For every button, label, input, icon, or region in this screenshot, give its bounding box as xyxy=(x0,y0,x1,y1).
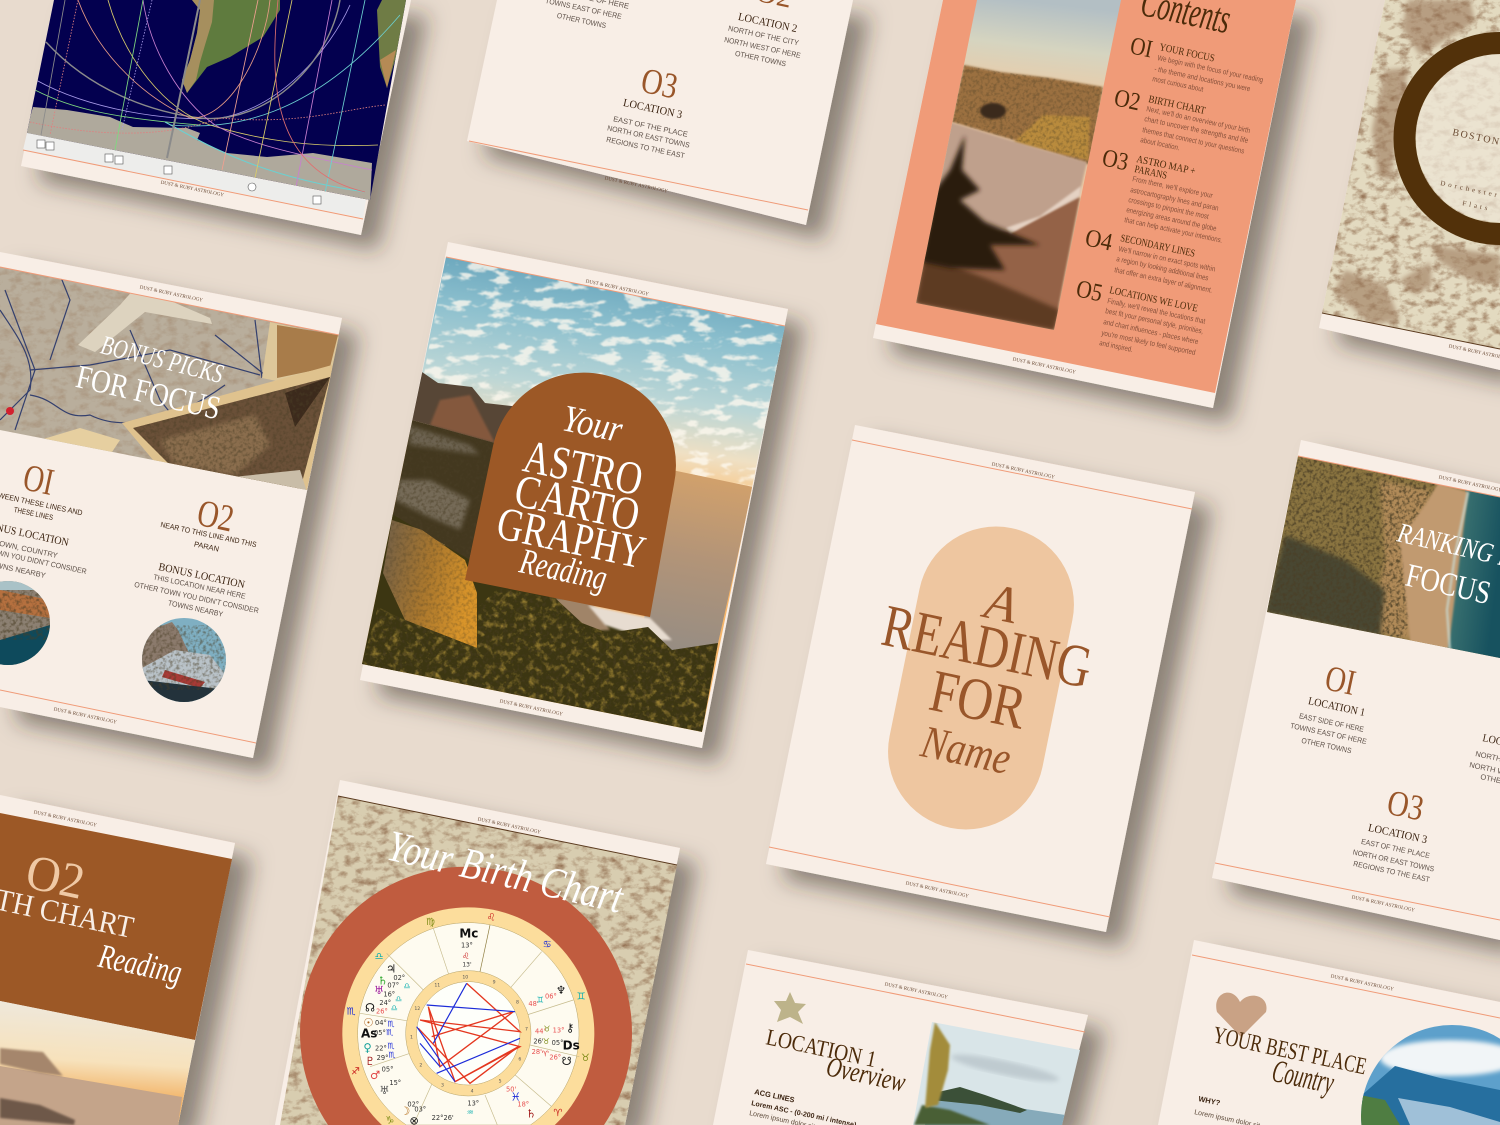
chart glyphs: 9 xyxy=(493,979,496,985)
cover title xyxy=(492,397,650,598)
chart glyphs xyxy=(347,913,590,1125)
chart glyphs: 6 xyxy=(518,1057,521,1063)
pill title: Name xyxy=(916,715,1016,784)
chart glyphs: 2 xyxy=(419,1063,422,1069)
column 02: PARAN xyxy=(193,540,220,554)
chart glyphs: 29° xyxy=(377,1054,388,1062)
pill title: READING xyxy=(877,592,1098,701)
header: DUST & RUBY ASTROLOGY xyxy=(33,810,97,829)
item 03: From there, we'll explore your xyxy=(1132,174,1214,200)
natal chart wheel xyxy=(342,907,594,1125)
location two text: NORTH WEST OF HERE xyxy=(723,35,802,60)
item 01: YOUR FOCUS xyxy=(1158,42,1216,65)
location three text: EAST OF THE PLACE xyxy=(612,114,689,139)
chart glyphs: ♅ xyxy=(379,1083,389,1097)
chart glyphs: 05° xyxy=(374,1029,386,1037)
item 04: a region by looking additional lines xyxy=(1116,254,1210,283)
item 02: themes that connect to your questions xyxy=(1142,125,1245,156)
page title: Country xyxy=(1269,1052,1338,1100)
page title xyxy=(1394,517,1500,612)
item 04: that offer an extra layer of alignment. xyxy=(1114,265,1213,295)
chart glyphs: 18° xyxy=(517,1101,529,1109)
chart glyphs: 28' xyxy=(532,1048,542,1056)
panel: ranking page xyxy=(1212,440,1500,940)
item 05 xyxy=(1074,275,1207,357)
chart glyphs: 07° xyxy=(387,981,399,989)
chart glyphs: ♎ xyxy=(375,951,384,962)
chart glyphs: 11 xyxy=(434,983,440,989)
chart glyphs: 03° xyxy=(414,1106,426,1114)
world map xyxy=(27,0,406,200)
map labels xyxy=(1440,127,1500,213)
chart glyphs: ♏ xyxy=(387,1020,395,1029)
peach pill xyxy=(874,513,1088,843)
pale inset inside the ring xyxy=(1416,54,1500,222)
cover title: Your xyxy=(559,397,626,451)
footer: DUST & RUBY ASTROLOGY xyxy=(1012,357,1076,376)
location 1: OTHER TOWNS xyxy=(1301,736,1352,755)
column 02 xyxy=(133,492,260,619)
location 1: LOCATION 1 xyxy=(1307,695,1366,719)
chart glyphs: 1 xyxy=(410,1034,413,1040)
orange rule xyxy=(1192,955,1500,1018)
chart glyphs: ♎ xyxy=(403,981,411,990)
chart glyphs: 3 xyxy=(441,1083,444,1089)
mountain lake photo xyxy=(1355,1020,1500,1125)
pill title: A xyxy=(977,572,1023,635)
location 2 xyxy=(1469,732,1500,793)
chart glyphs: 48' xyxy=(528,1000,539,1008)
header: DUST & RUBY ASTROLOGY xyxy=(991,462,1055,481)
chart glyphs: ♎ xyxy=(395,995,402,1004)
location two text: OTHER TOWNS xyxy=(734,49,787,68)
sunset coast photo xyxy=(340,250,790,740)
item 01: We begin with the focus of your reading xyxy=(1157,53,1264,84)
column 02: TOWNS NEARBY xyxy=(167,598,224,619)
item 05: Finally, we'll reveal the locations that xyxy=(1107,296,1207,326)
location 3: O3 xyxy=(1384,782,1427,829)
chart glyphs: ♋ xyxy=(543,940,552,951)
chart glyphs: ♇ xyxy=(365,1054,375,1068)
panel: birth chart chapter page xyxy=(0,795,235,1125)
legend band xyxy=(23,133,366,218)
item 05: you're most likely to feel supported xyxy=(1101,328,1196,357)
chart glyphs: ☋ xyxy=(562,1054,572,1068)
panel: astrocartography world map page xyxy=(0,0,420,235)
item 04: SECONDARY LINES xyxy=(1119,233,1196,260)
column 01: OI xyxy=(19,457,58,504)
chart glyphs: 02° xyxy=(407,1101,419,1109)
item 02 xyxy=(1112,84,1251,156)
footer: DUST & RUBY ASTROLOGY xyxy=(1351,895,1415,914)
column 01 xyxy=(0,457,88,580)
chapter title xyxy=(0,843,185,992)
chart glyphs: 22° xyxy=(375,1045,387,1053)
ring xyxy=(1404,43,1500,234)
item 05: best fit your personal style, priorities, xyxy=(1105,306,1204,336)
item 01: most curious about xyxy=(1152,74,1205,94)
cover title: Reading xyxy=(516,540,611,598)
chart glyphs: 04° xyxy=(375,1019,387,1027)
cover title: CARTO xyxy=(510,465,644,542)
chart glyphs: 24° xyxy=(379,999,391,1007)
lake island photo xyxy=(913,1022,1080,1125)
chart glyphs: ♏ xyxy=(387,1041,395,1050)
footer: DUST & RUBY ASTROLOGY xyxy=(53,707,117,726)
chart glyphs: 22°26' xyxy=(432,1114,454,1122)
location 1 xyxy=(1289,658,1368,755)
chart glyphs: Ds xyxy=(563,1038,580,1052)
footer: DUST & RUBY ASTROLOGY xyxy=(160,181,224,198)
arch title badge xyxy=(465,373,676,617)
panel: bonus picks page xyxy=(0,252,345,758)
body text: WHY? xyxy=(1198,1094,1221,1108)
chart glyphs: ☽ xyxy=(400,1104,410,1118)
item 02: Next, we'll do an overview of your birth xyxy=(1146,104,1251,135)
column 02: BONUS LOCATION xyxy=(157,561,246,591)
chart glyphs: ♍ xyxy=(426,917,435,928)
column 02: OTHER TOWN YOU DIDN'T CONSIDER xyxy=(133,580,260,615)
chart glyphs: 13° xyxy=(553,1026,564,1034)
location 1: OI xyxy=(1322,658,1359,703)
chart glyphs: ♉ xyxy=(581,1053,590,1064)
chart glyphs: As xyxy=(361,1026,377,1040)
item 01 xyxy=(1128,32,1264,94)
chart glyphs: ♄ xyxy=(526,1106,536,1120)
chart glyphs: 50' xyxy=(506,1086,516,1094)
chart glyphs: 13° xyxy=(467,1100,479,1108)
chart glyphs: ♎ xyxy=(391,1004,398,1013)
rules xyxy=(769,440,1192,917)
item 02: about location. xyxy=(1140,135,1181,152)
column 02: THIS LOCATION NEAR HERE xyxy=(153,572,246,601)
icon: origami map heart xyxy=(1216,993,1267,1037)
map bottom rule xyxy=(1322,313,1500,349)
coastal cliff photo xyxy=(916,0,1121,330)
header rule xyxy=(338,796,677,865)
chart glyphs: ♏ xyxy=(388,1050,396,1059)
item 02: O2 xyxy=(1112,84,1143,116)
page title xyxy=(73,330,227,427)
chart glyphs: ♏ xyxy=(347,1006,356,1017)
chart glyphs: ♀ xyxy=(363,1041,372,1055)
chart glyphs: ♌ xyxy=(487,913,496,924)
chart glyphs: ♐ xyxy=(351,1066,360,1077)
page title: YOUR BEST PLACE xyxy=(1211,1022,1369,1080)
chart glyphs: ♄ xyxy=(378,974,388,988)
orange rule xyxy=(1298,456,1500,497)
orange rule xyxy=(469,141,808,210)
location three text xyxy=(605,60,691,160)
chapter title: O2 xyxy=(21,843,90,910)
chart glyphs: ♒ xyxy=(467,1108,474,1117)
item 05: and chart influences - places where xyxy=(1103,317,1199,346)
column 02: NEAR TO THIS LINE AND THIS xyxy=(160,520,257,549)
panel: antique map section page xyxy=(1310,0,1500,370)
location two text xyxy=(723,0,802,68)
item 03: crossings to pinpoint the most xyxy=(1128,195,1210,221)
location three text: O3 xyxy=(638,60,681,107)
chart glyphs: 12 xyxy=(414,1006,420,1012)
chart glyphs: 44' xyxy=(535,1027,545,1035)
page title xyxy=(764,1024,908,1099)
item 05: LOCATIONS WE LOVE xyxy=(1108,285,1199,315)
body text: ACG LINES xyxy=(754,1087,795,1104)
header: DUST & RUBY ASTROLOGY xyxy=(139,285,203,304)
column 02: O2 xyxy=(194,492,237,541)
header: DUST & RUBY ASTROLOGY xyxy=(884,982,948,1001)
photo: harbour town xyxy=(0,581,50,665)
panel: best place page xyxy=(1158,940,1500,1125)
chart glyphs: ♈ xyxy=(553,1108,562,1119)
chart glyphs: ♃ xyxy=(386,961,396,975)
topographic map xyxy=(270,790,690,1125)
orange background block xyxy=(876,0,1296,393)
item 04: We'll narrow in on exact spots within xyxy=(1118,244,1216,274)
footer: DUST & RUBY ASTROLOGY xyxy=(604,176,668,195)
chart glyphs: 26° xyxy=(549,1053,561,1061)
chart glyphs: ♊ xyxy=(537,996,544,1005)
page title: Overview xyxy=(824,1052,908,1099)
item 01: - the theme and locations you were xyxy=(1154,64,1251,93)
page title xyxy=(1211,1022,1369,1100)
map labels: Flats xyxy=(1462,199,1491,213)
location 1: TOWNS EAST OF HERE xyxy=(1289,721,1368,746)
map labels: BOSTON xyxy=(1451,127,1500,148)
orange rule xyxy=(23,150,363,219)
panel: contents page xyxy=(873,0,1296,408)
body text xyxy=(749,1087,857,1125)
orange rule xyxy=(1215,863,1500,920)
orange rule xyxy=(446,257,785,326)
chart glyphs: 26° xyxy=(376,1007,388,1015)
orange rule xyxy=(746,964,1085,1032)
pill title xyxy=(877,572,1098,784)
page title: BONUS PICKS xyxy=(98,330,227,389)
chart glyphs: ♆ xyxy=(556,983,566,997)
header: DUST & RUBY ASTROLOGY xyxy=(1330,974,1394,993)
chart glyphs: Mc xyxy=(459,926,478,940)
chart glyphs: ♏ xyxy=(386,1028,394,1037)
item 03: O3 xyxy=(1100,144,1131,176)
chart glyphs: 06° xyxy=(545,992,557,1000)
column 01: THESE LINES xyxy=(13,505,54,522)
dark ground under boulder xyxy=(362,514,626,672)
orange rule xyxy=(0,690,256,743)
cover title: GRAPHY xyxy=(492,497,650,579)
aerial coast photo xyxy=(1260,450,1500,665)
orange rule xyxy=(0,267,339,335)
chart glyphs: 5 xyxy=(499,1079,502,1085)
item 03: astrocartography lines and paran xyxy=(1130,185,1219,213)
sunset photo xyxy=(0,1000,200,1125)
item 03: PARANS xyxy=(1133,164,1168,182)
location 1: EAST SIDE OF HERE xyxy=(1298,711,1365,734)
chart glyphs: 15° xyxy=(389,1079,401,1087)
panel: cover page xyxy=(340,242,790,748)
chart glyphs: ♉ xyxy=(543,1025,551,1034)
panel: name title page xyxy=(766,425,1195,932)
chart glyphs: ♈ xyxy=(542,1050,549,1059)
chart glyphs: ♅ xyxy=(374,983,384,997)
location 3: LOCATION 3 xyxy=(1367,822,1429,846)
item 03: energizing areas around the globe xyxy=(1126,205,1217,233)
line markers xyxy=(37,140,321,204)
chart glyphs: 13° xyxy=(461,941,473,949)
road map and photos xyxy=(0,260,345,500)
pill title: FOR xyxy=(924,657,1032,742)
chart glyphs: ⚷ xyxy=(566,1021,574,1035)
map labels: Dorchester xyxy=(1440,179,1500,200)
location three text: REGIONS TO THE EAST xyxy=(605,135,686,160)
item 04 xyxy=(1083,224,1216,295)
footer: DUST & RUBY ASTROLOGY xyxy=(905,881,969,900)
chart glyphs: ♊ xyxy=(577,991,586,1002)
antique map xyxy=(1310,0,1500,352)
location three text: NORTH OR EAST TOWNS xyxy=(607,123,691,150)
header: DUST & RUBY ASTROLOGY xyxy=(585,279,649,298)
panel: location overview page xyxy=(713,950,1088,1125)
item 03: that can help activate your intentions. xyxy=(1124,215,1223,245)
item 04: O4 xyxy=(1083,224,1115,257)
chart glyphs: ♂ xyxy=(370,1068,380,1082)
chart glyphs: ♓ xyxy=(511,1090,521,1104)
location 3: EAST OF THE PLACE xyxy=(1360,837,1431,860)
item 02: BIRTH CHART xyxy=(1147,94,1207,117)
footer: DUST & RUBY ASTROLOGY xyxy=(499,699,563,718)
chart glyphs: 10 xyxy=(462,974,468,980)
page title: FOR FOCUS xyxy=(73,359,224,427)
chart glyphs: 02° xyxy=(393,974,405,982)
location 3: REGIONS TO THE EAST xyxy=(1352,859,1431,884)
chart glyphs: 13' xyxy=(462,962,472,969)
chart glyphs: ☉ xyxy=(363,1016,373,1030)
chart glyphs: 05° xyxy=(552,1039,563,1047)
aspect lines xyxy=(417,983,520,1083)
item 01: OI xyxy=(1128,32,1155,63)
chart glyphs: ♉ xyxy=(543,1037,550,1046)
chart glyphs: 16° xyxy=(383,991,395,999)
brown band xyxy=(0,813,232,1040)
red disc xyxy=(300,867,632,1125)
location two text: NORTH OF THE CITY xyxy=(727,24,800,47)
item 05: and inspired. xyxy=(1099,338,1134,354)
panel: your birth chart page xyxy=(270,780,690,1125)
location 3: NORTH OR EAST TOWNS xyxy=(1352,848,1435,874)
location two text: LOCATION 2 xyxy=(737,11,798,35)
chart title: Your Birth Chart xyxy=(383,821,629,923)
chart glyphs: 05° xyxy=(382,1066,393,1074)
cover title: ASTRO xyxy=(519,430,647,506)
item 03: ASTRO MAP + xyxy=(1135,154,1196,177)
location 3 xyxy=(1352,782,1435,884)
chart glyphs: 8 xyxy=(516,999,519,1005)
chapter title: Reading xyxy=(95,938,185,992)
panel: locations list page xyxy=(467,0,853,225)
cloud texture xyxy=(424,262,782,487)
photo: snowy mountain village xyxy=(142,618,226,702)
chart glyphs: 4 xyxy=(471,1089,474,1095)
item 02: chart to uncover the strengths and life xyxy=(1144,114,1249,145)
chart glyphs: 7 xyxy=(525,1027,528,1033)
location three text: LOCATION 3 xyxy=(622,97,684,121)
page title: LOCATION 1 xyxy=(764,1024,879,1072)
chart glyphs: ♌ xyxy=(462,952,470,962)
item 05: O5 xyxy=(1074,275,1105,307)
item 03 xyxy=(1100,144,1223,245)
header: DUST & RUBY ASTROLOGY xyxy=(477,817,541,836)
chart glyphs: ☊ xyxy=(365,1001,375,1015)
location one text: OTHER TOWNS xyxy=(556,11,607,30)
chart glyphs: 26' xyxy=(533,1037,544,1045)
icon: map star xyxy=(774,992,806,1024)
body text xyxy=(1194,1094,1278,1125)
